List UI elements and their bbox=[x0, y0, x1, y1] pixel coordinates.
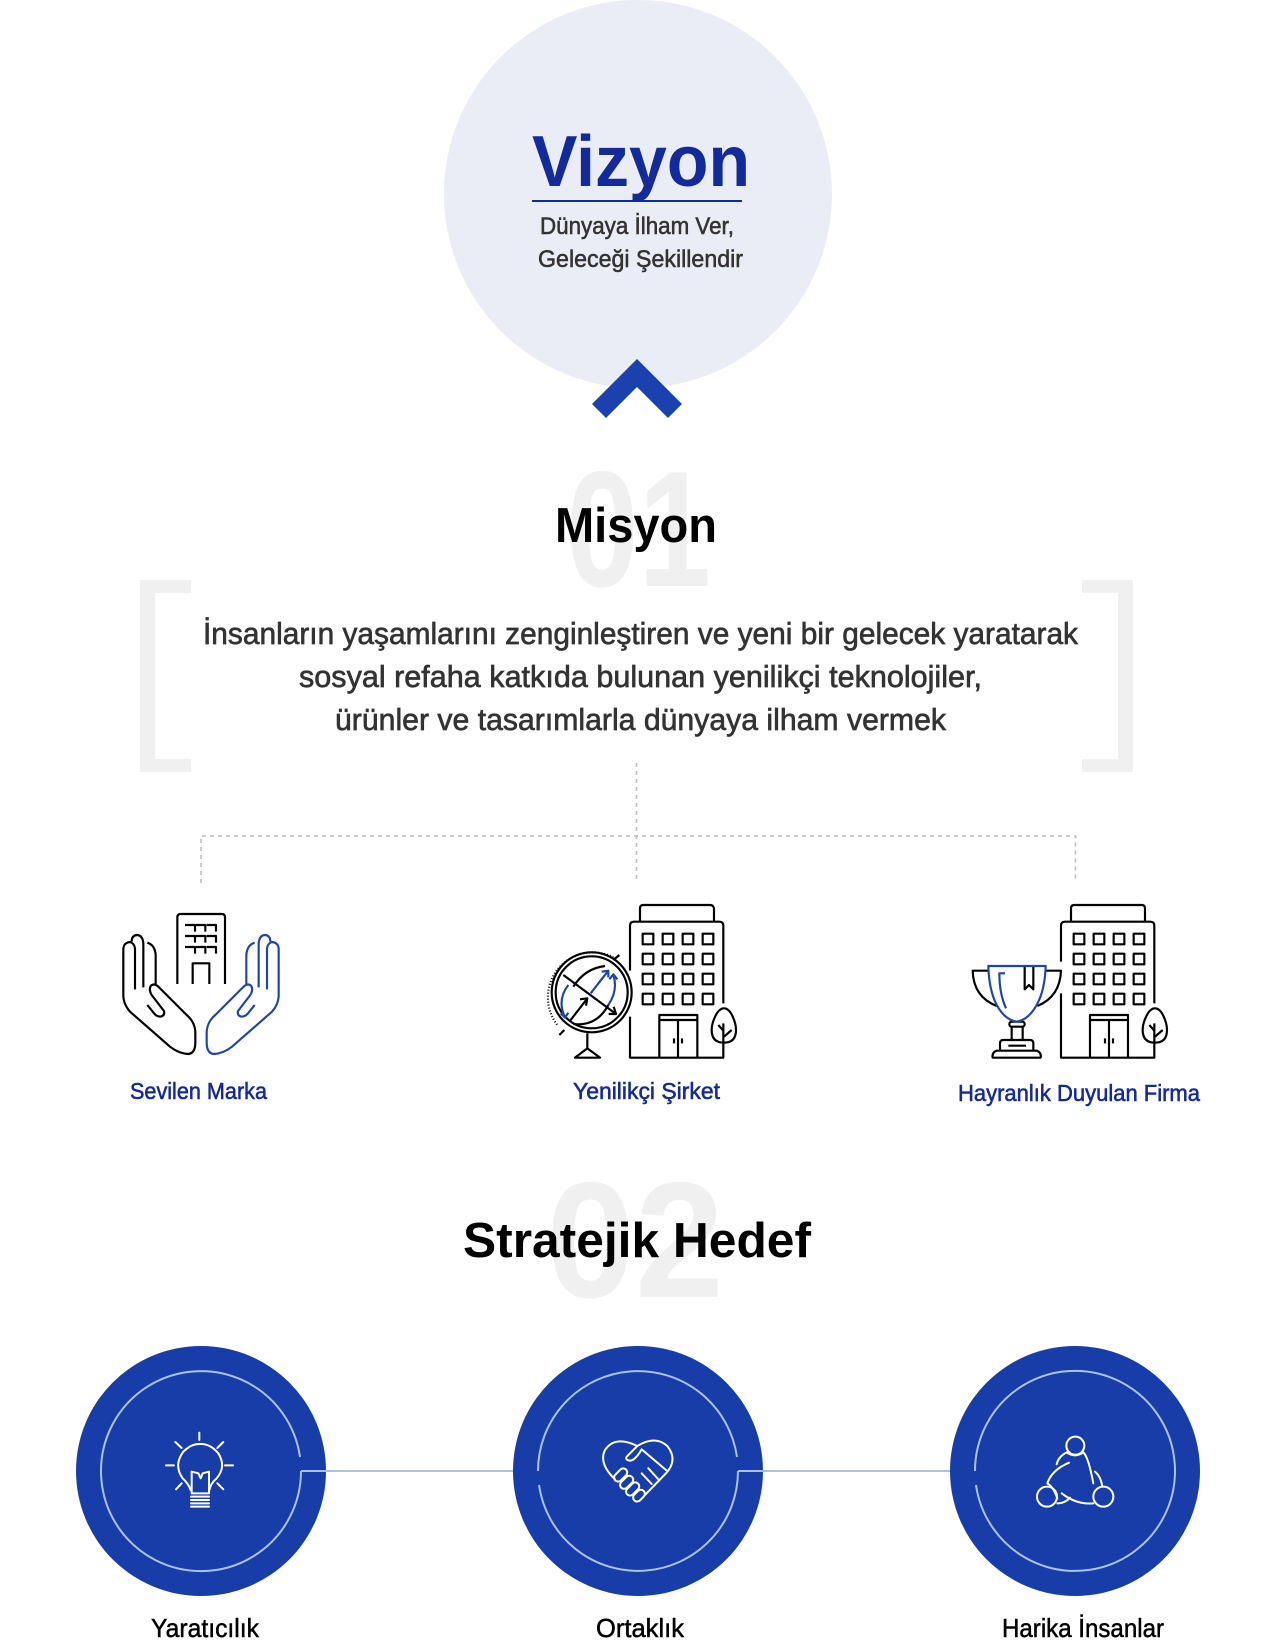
label: Hayranlık Duyulan Firma bbox=[958, 1080, 1200, 1106]
mission heading: Misyon bbox=[555, 499, 717, 553]
panel: partnership bbox=[513, 1346, 763, 1642]
inner ring bbox=[538, 1371, 738, 1571]
left bracket bbox=[140, 580, 191, 772]
vision text bbox=[538, 213, 743, 273]
connector line bbox=[738, 1470, 975, 1472]
title underline bbox=[532, 200, 742, 202]
inner ring bbox=[975, 1371, 1175, 1571]
panel: mission bbox=[140, 437, 1133, 883]
label: Sevilen Marka bbox=[130, 1078, 267, 1104]
vision text: Geleceği Şekillendir bbox=[538, 246, 743, 273]
blue circle bbox=[950, 1346, 1200, 1596]
strategic heading: Stratejik Hedef bbox=[463, 1214, 812, 1268]
mission text: ürünler ve tasarımlarla dünyaya ilham vermek bbox=[335, 702, 946, 737]
mission text: İnsanların yaşamlarını zenginleştiren ve yeni bir gelecek yaratarak bbox=[203, 616, 1078, 651]
icon: handshake heart bbox=[603, 1440, 673, 1503]
icon: building with tree bbox=[630, 905, 736, 1058]
arrow: chevron up bbox=[592, 359, 682, 418]
connector line bbox=[301, 1470, 539, 1472]
blue circle bbox=[76, 1346, 326, 1596]
mission text: sosyal refaha katkıda bulunan yenilikçi teknolojiler, bbox=[299, 659, 982, 694]
dashed connector tree bbox=[201, 763, 1076, 883]
mission text bbox=[203, 616, 1078, 737]
panel: great people bbox=[950, 1346, 1200, 1642]
icon: globe bbox=[548, 952, 632, 1058]
panel: creativity bbox=[76, 1346, 326, 1642]
vision title: Vizyon bbox=[532, 122, 750, 202]
panel: vision bbox=[444, 0, 832, 418]
vision circle bbox=[444, 0, 832, 388]
panel: beloved brand bbox=[123, 914, 279, 1104]
panel: admired firm bbox=[958, 905, 1200, 1106]
icon: light bulb bbox=[166, 1433, 233, 1507]
number 01: 01 bbox=[566, 437, 711, 621]
label: Yenilikçi Şirket bbox=[573, 1078, 721, 1104]
panel: strategic goal heading bbox=[463, 1148, 812, 1332]
vision text: Dünyaya İlham Ver, bbox=[540, 213, 734, 240]
inner ring bbox=[101, 1371, 301, 1571]
right bracket bbox=[1082, 580, 1133, 772]
icon: trophy and building bbox=[973, 905, 1167, 1058]
blue circle bbox=[513, 1346, 763, 1596]
number 02: 02 bbox=[546, 1148, 724, 1332]
icon: hands holding building bbox=[123, 914, 279, 1054]
panel: innovative company bbox=[548, 905, 736, 1104]
icon: three people bbox=[1037, 1437, 1113, 1507]
